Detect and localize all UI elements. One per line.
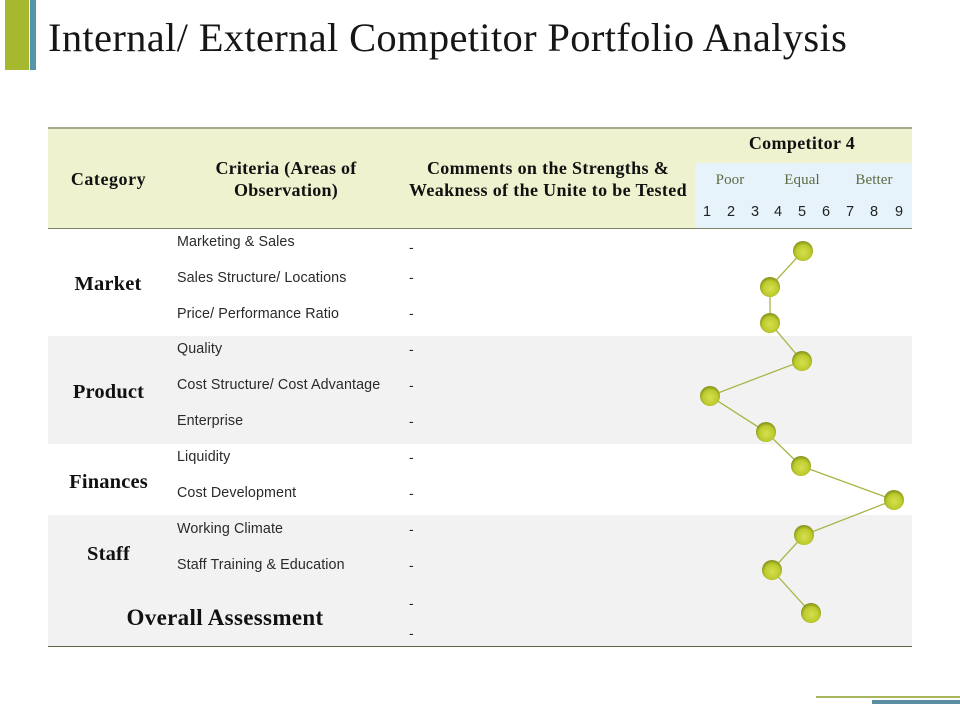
panel: product row band [48,336,912,444]
heading: criteria: Criteria (Areas of [215,158,357,178]
rating scale numbers: 3 [751,204,759,220]
comment dashes: - [409,625,414,641]
footer accent lines [816,696,960,704]
heading: category: Category [71,169,146,189]
rating scale numbers: 9 [895,204,903,220]
rating scale numbers: 1 [703,204,711,220]
comment dashes: - [409,557,414,573]
line chart: competitor 4 ratings [700,241,904,623]
comment dashes: - [409,269,414,285]
criteria list: Liquidity [177,449,230,465]
comment dashes: - [409,485,414,501]
heading: comments: Comments on the Strengths & [427,158,669,178]
rating scale numbers: 4 [774,204,782,220]
criteria list: Staff Training & Education [177,557,345,573]
criteria list: Marketing & Sales [177,234,295,250]
criteria list: Cost Structure/ Cost Advantage [177,377,380,393]
accent bar: green and teal [5,0,36,70]
rating scale numbers: 7 [846,204,854,220]
criteria list: Quality [177,341,222,357]
criteria list: Enterprise [177,413,243,429]
category: overall assessment: Overall Assessment [127,605,323,630]
category: product: Product [73,381,144,403]
criteria list: Sales Structure/ Locations [177,270,346,286]
comment dashes: - [409,521,414,537]
criteria list: Cost Development [177,485,296,501]
heading: criteria [215,158,357,200]
rating scale numbers [703,204,903,220]
rating scale numbers: 8 [870,204,878,220]
panel: rating scale header [695,163,912,228]
comment dashes: - [409,595,414,611]
title: Internal/ External Competitor Portfolio Analysis [48,15,847,60]
criteria list: Price/ Performance Ratio [177,306,339,322]
rating scale numbers: 2 [727,204,735,220]
comment dashes: - [409,239,414,255]
rating scale numbers: 6 [822,204,830,220]
heading: competitor 4: Competitor 4 [749,133,855,153]
category: market: Market [75,273,141,295]
criteria list: Working Climate [177,521,283,537]
comment dashes: - [409,449,414,465]
comment dashes: - [409,305,414,321]
criteria list [177,234,380,573]
category: finances: Finances [69,471,148,493]
rating label: poor: Poor [716,172,744,188]
heading: criteria: Observation) [234,180,338,200]
panel: staff and overall row band [48,515,912,647]
comment dashes [409,239,414,641]
panel: table header [48,127,912,229]
comment dashes: - [409,413,414,429]
heading: comments [409,158,687,200]
rating label: better: Better [855,172,893,188]
comment dashes: - [409,341,414,357]
heading: comments: Weakness of the Unite to be Tested [409,180,687,200]
category: staff: Staff [87,543,130,565]
rating scale numbers: 5 [798,204,806,220]
comment dashes: - [409,377,414,393]
rating label: equal: Equal [784,172,820,188]
